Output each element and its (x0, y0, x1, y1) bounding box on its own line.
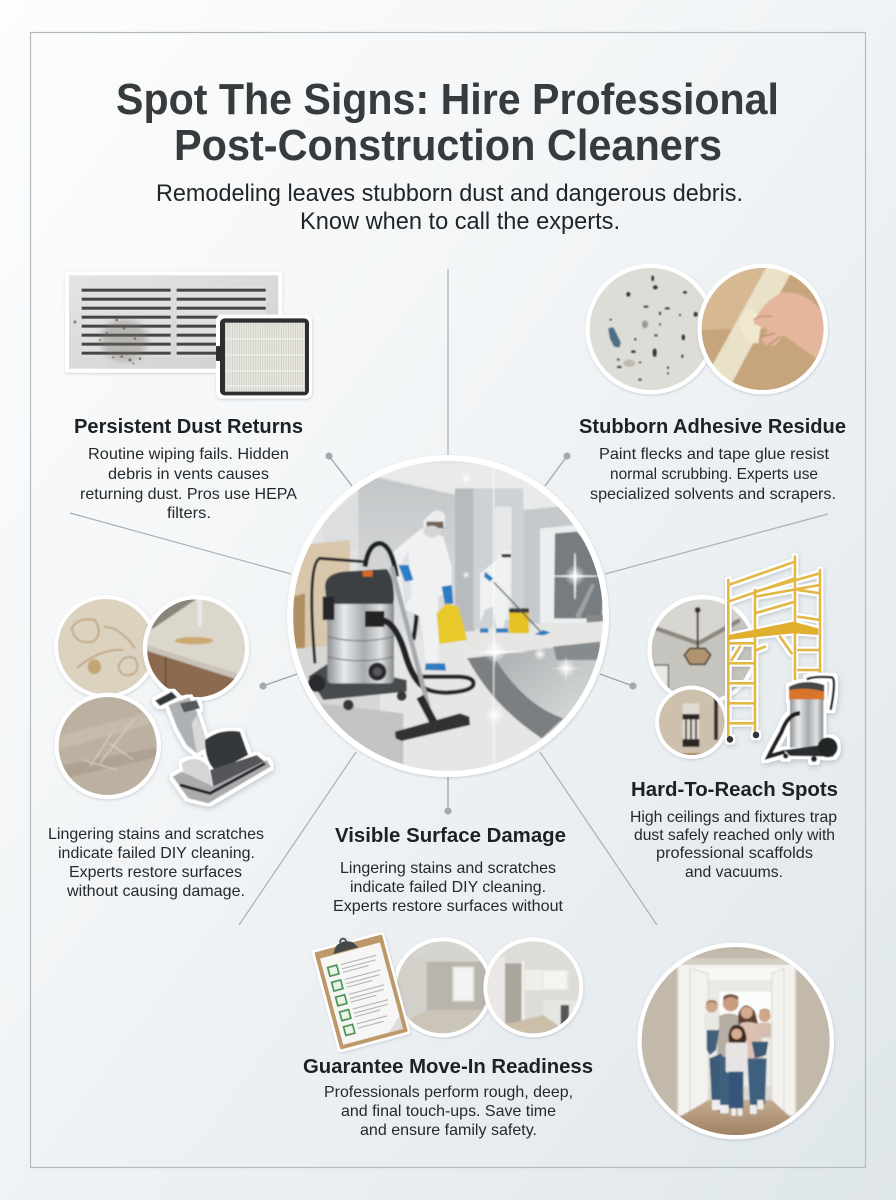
icon: stain photos and floor scrubber (53, 593, 271, 803)
icon: checklist and empty room photos (310, 928, 585, 1053)
panel: visible surface damage (333, 824, 566, 915)
body text: professional scaffolds (656, 845, 813, 862)
body text: Experts restore surfaces (69, 864, 242, 881)
scaffold (727, 557, 820, 743)
panel: guarantee move-in readiness (303, 928, 593, 1139)
body text: Professionals perform rough, deep, (324, 1084, 573, 1101)
connector: hard-to-reach (600, 674, 637, 690)
heading: Visible Surface Damage (335, 824, 566, 847)
body text: dust safely reached only with (634, 827, 835, 844)
worker one (411, 614, 420, 642)
body text (324, 1084, 573, 1139)
connector: dust section (325, 452, 352, 486)
polished floor (467, 647, 596, 736)
body text (80, 446, 297, 522)
icon: family in doorway photo (637, 943, 837, 1143)
central photo: crew cleaning with vacuum (280, 450, 620, 780)
hose loop (418, 677, 473, 693)
body text: Lingering stains and scratches (48, 826, 264, 843)
body text: High ceilings and fixtures trap (630, 809, 837, 826)
body text: debris in vents causes (108, 466, 269, 483)
panel: stains and floor machine (48, 593, 271, 900)
body text: filters. (167, 505, 211, 522)
body text: and vacuums. (685, 864, 783, 881)
connector: adhesive section (545, 452, 571, 486)
heading: Hard-To-Reach Spots (631, 778, 838, 801)
body text: returning dust. Pros use HEPA (80, 486, 297, 503)
vacuum (768, 677, 838, 762)
family (723, 995, 739, 1011)
body text: Paint flecks and tape glue resist (599, 446, 830, 463)
heading: Guarantee Move-In Readiness (303, 1055, 593, 1078)
body text: and ensure family safety. (360, 1122, 537, 1139)
body text: normal scrubbing. Experts use (610, 466, 818, 483)
icon: dirty vent and HEPA filter (65, 272, 312, 399)
title (116, 75, 779, 170)
heading: Stubborn Adhesive Residue (579, 415, 846, 438)
body text: and final touch-ups. Save time (341, 1103, 556, 1120)
connector: surface damage (444, 776, 452, 815)
body text (48, 826, 264, 900)
icon: ceiling light, wall sconce, scaffold, vacuum (647, 557, 838, 763)
body text (630, 809, 837, 881)
worker two (480, 550, 512, 630)
subtitle (156, 180, 743, 235)
body text: indicate failed DIY cleaning. (58, 845, 255, 862)
panel: persistent dust returns (65, 272, 312, 522)
body text (333, 860, 564, 915)
subtitle: Remodeling leaves stubborn dust and dangerous debris. (156, 180, 743, 207)
icon: paint flecks and tape photos (585, 262, 830, 395)
heading: Persistent Dust Returns (74, 415, 303, 438)
body text (590, 446, 836, 503)
body text: Lingering stains and scratches (340, 860, 556, 877)
sparkles (493, 467, 494, 767)
panel: hard-to-reach spots (630, 557, 838, 881)
panel: stubborn adhesive residue (579, 262, 846, 503)
connector: surface images (259, 674, 297, 690)
body text: without causing damage. (66, 883, 245, 900)
body text: indicate failed DIY cleaning. (350, 879, 546, 896)
divider lines between sections (70, 269, 828, 925)
title: Spot The Signs: Hire Professional (116, 75, 779, 124)
body text: specialized solvents and scrapers. (590, 486, 836, 503)
body text: Routine wiping fails. Hidden (88, 446, 289, 463)
body text: Experts restore surfaces without (333, 898, 564, 915)
subtitle: Know when to call the experts. (300, 208, 620, 235)
title: Post-Construction Cleaners (174, 121, 722, 170)
vacuum cleaner (312, 558, 363, 663)
